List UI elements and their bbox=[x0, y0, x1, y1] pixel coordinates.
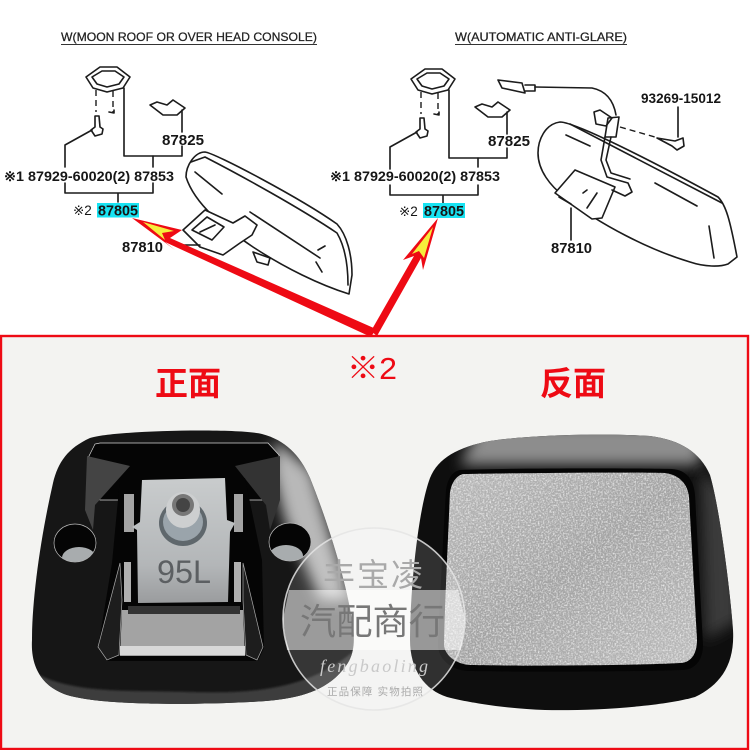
metal clip plate bbox=[132, 478, 235, 603]
label: 87929-60020 and 87853: ※1 87929-60020(2) 87853 bbox=[330, 169, 501, 184]
label: 87810: 87810 bbox=[551, 240, 592, 257]
label: ※2: ※2 bbox=[399, 204, 418, 219]
watermark title: 汽配商行 bbox=[300, 601, 445, 642]
watermark shop name: 丰宝凌 bbox=[323, 557, 423, 593]
screw hole left bbox=[54, 524, 96, 562]
watermark stamp bbox=[283, 528, 465, 710]
screw hole right bbox=[268, 522, 311, 562]
panel: right parts diagram bbox=[330, 30, 737, 266]
label: 87825: 87825 bbox=[488, 133, 530, 150]
mirror drawing with wire and screw bbox=[498, 80, 737, 266]
watermark note: 正品保障 实物拍照 bbox=[327, 685, 424, 698]
stamped marking: 95L bbox=[157, 554, 211, 590]
mirror drawing bbox=[175, 152, 352, 294]
parts drawing: mount, bolt, clip and leaders bbox=[65, 67, 185, 202]
label: 87825: 87825 bbox=[162, 132, 204, 149]
heading: automatic anti-glare: W(AUTOMATIC ANTI-GLARE) bbox=[455, 30, 627, 44]
red heading: front: 正面 bbox=[155, 365, 221, 402]
label: 93269-15012: 93269-15012 bbox=[641, 91, 721, 106]
heading: moon roof or over head console: W(MOON ROOF OR OVER HEAD CONSOLE) bbox=[61, 30, 317, 44]
panel: photo frame bbox=[1, 336, 748, 749]
photo: back of mount bbox=[405, 425, 740, 715]
arrow: to right 87805 bbox=[371, 218, 438, 336]
silver adhesive pad bbox=[440, 470, 702, 668]
panel: left parts diagram bbox=[4, 30, 352, 294]
threaded nut bbox=[159, 492, 207, 546]
photo: front of mount bbox=[25, 425, 360, 710]
label: ※2: ※2 bbox=[73, 203, 92, 218]
highlighted part number 87805: 87805 bbox=[98, 202, 138, 220]
highlighted part number 87805: 87805 bbox=[424, 203, 464, 220]
diagram background bbox=[0, 0, 750, 335]
watermark script: fengbaoling bbox=[320, 656, 428, 676]
red heading: back: 反面 bbox=[540, 365, 606, 402]
label: 87929-60020 and 87853: ※1 87929-60020(2) 87853 bbox=[4, 169, 175, 184]
red label: ※2: ※2 bbox=[347, 351, 397, 386]
parts drawing: mount, bolt, clip and leaders bbox=[390, 69, 510, 204]
arrow: to left 87805 bbox=[132, 218, 376, 337]
label: 87810: 87810 bbox=[122, 239, 163, 256]
